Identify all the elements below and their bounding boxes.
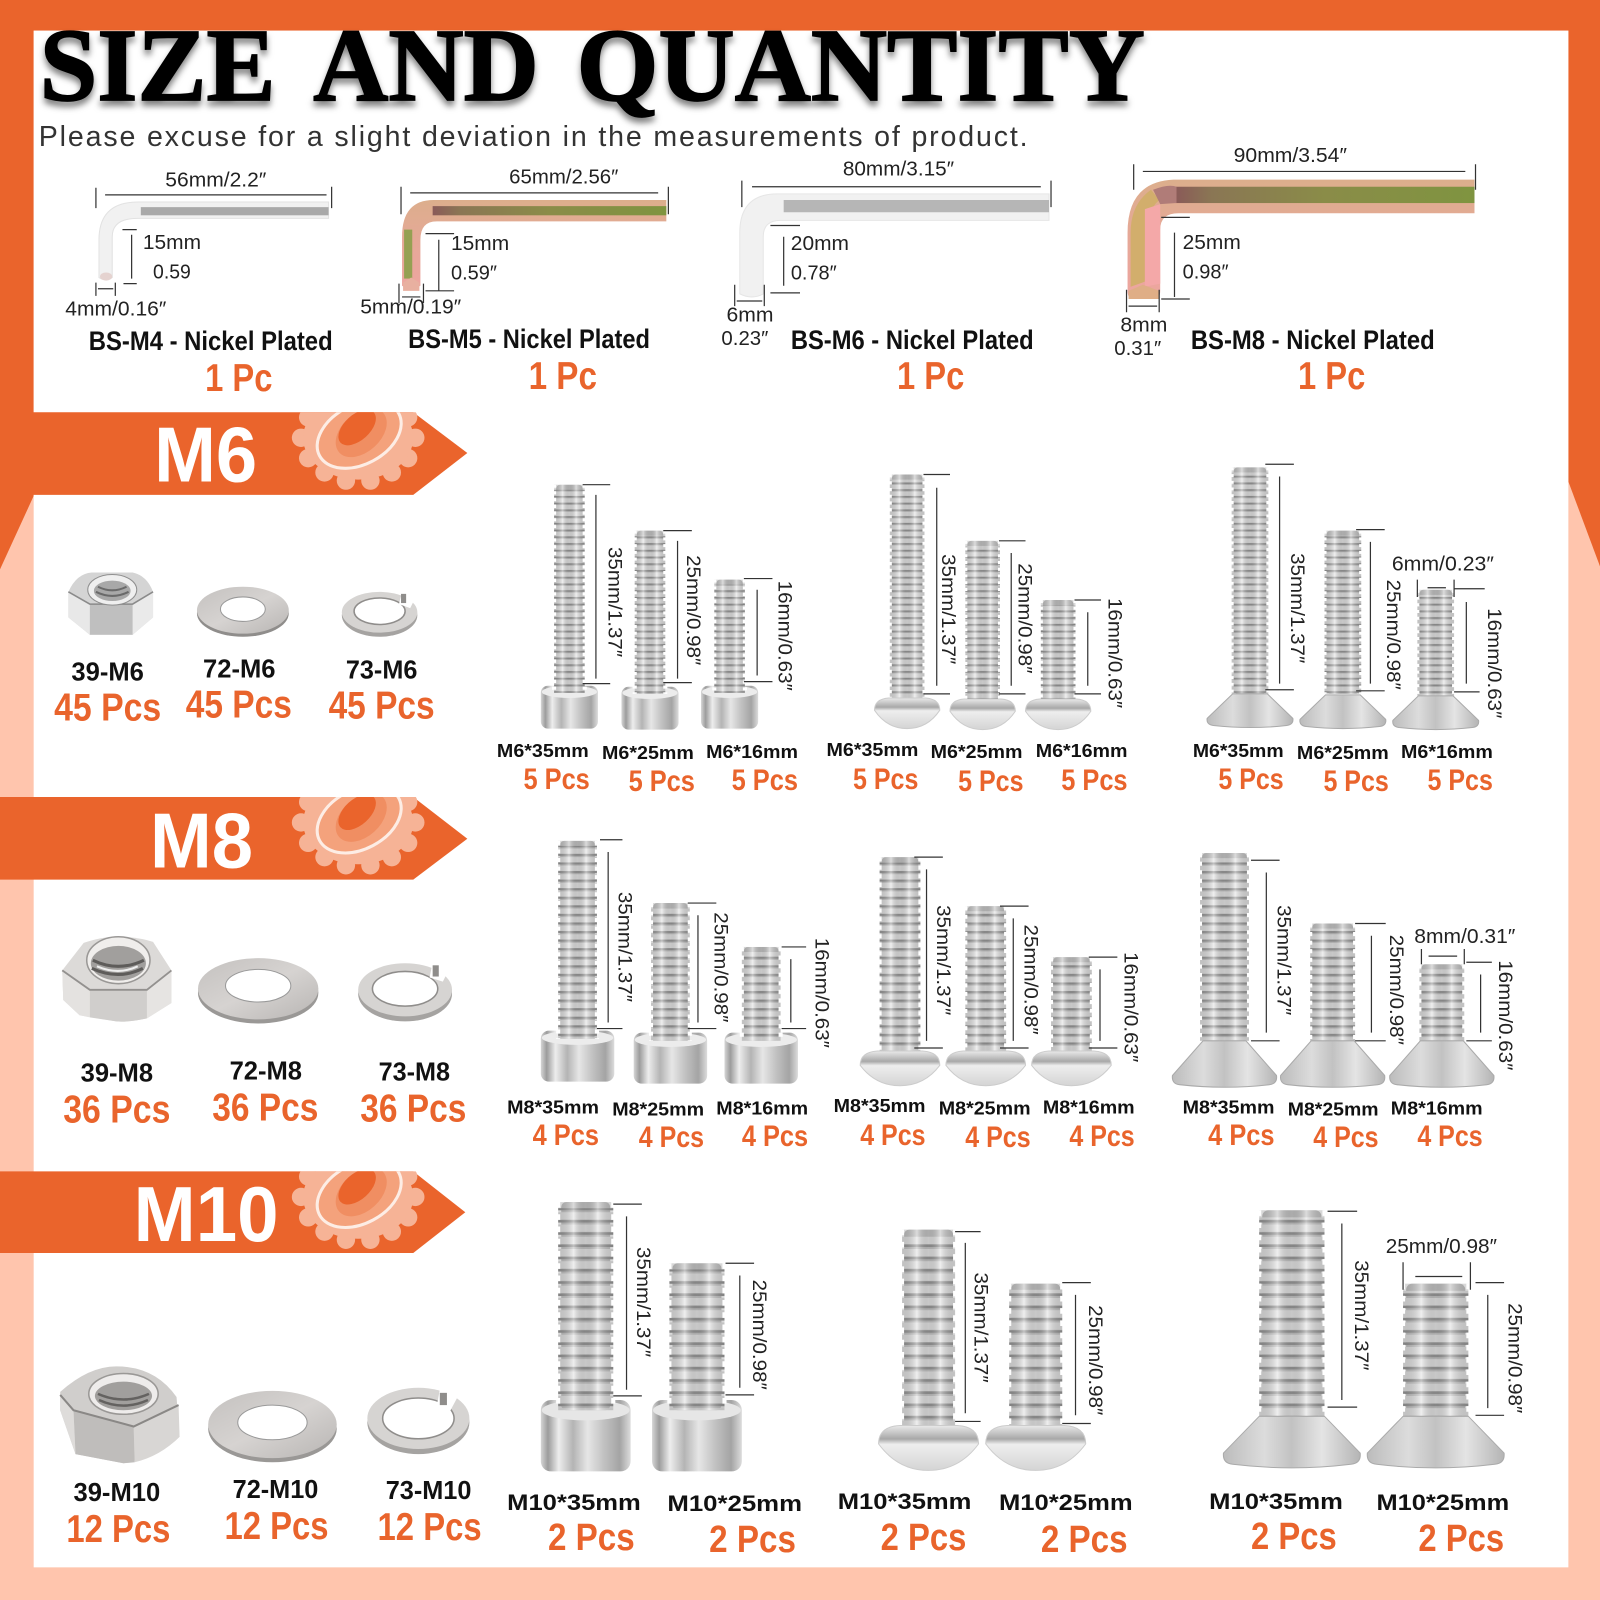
panel: M6 nuts and washers — [54, 572, 435, 729]
labels and quantities: 4 Pcs — [1417, 1120, 1483, 1153]
labels and quantities: M8*25mm — [612, 1098, 704, 1119]
bolt: M10*25 socket — [652, 1263, 742, 1471]
icon: M6 lock washer — [342, 592, 417, 637]
hex key BS-M5: BS-M5 - Nickel Plated — [408, 324, 650, 354]
dimension 16mm: 16mm/0.63″ — [1103, 598, 1125, 708]
panel: M8 button head bolts — [834, 857, 1142, 1154]
labels and quantities: 4 Pcs — [742, 1120, 808, 1153]
dimension 35mm: 35mm/1.37″ — [603, 547, 625, 657]
panel: M8 socket head bolts — [507, 840, 832, 1154]
bolt: M8*16 flat — [1390, 964, 1494, 1087]
bolt: M10*35 socket — [541, 1202, 631, 1471]
banner: M6 — [34, 412, 468, 495]
bolt: M8*25 flat — [1280, 923, 1385, 1087]
labels and quantities: 2 Pcs — [548, 1516, 635, 1558]
dimension lines — [1265, 464, 1485, 692]
subtitle: Please excuse for a slight deviation in the measurements of product. — [39, 121, 1028, 153]
labels and quantities: M6*35mm — [497, 740, 589, 761]
hex key BS-M6: 0.23″ — [721, 328, 768, 350]
dimension 16mm: 16mm/0.63″ — [1120, 952, 1142, 1062]
dimension 35mm: 35mm/1.37″ — [970, 1272, 992, 1383]
label: 73-M6: 73-M6 — [346, 657, 417, 685]
icon: M8 lock washer — [358, 962, 452, 1021]
labels and quantities: 2 Pcs — [1041, 1518, 1128, 1560]
labels and quantities: 5 Pcs — [958, 765, 1023, 798]
bolt: M8*16 button — [1032, 957, 1111, 1086]
panel: M6 socket head bolts — [497, 485, 798, 798]
quantity: 39-M6: 45 Pcs — [54, 686, 161, 729]
hex key BS-M4: 4mm/0.16″ — [65, 298, 166, 320]
dimension 35mm: 35mm/1.37″ — [1350, 1260, 1372, 1371]
labels and quantities: 2 Pcs — [1418, 1517, 1504, 1559]
bolt: M10*35 button — [879, 1230, 979, 1470]
bolt: M10*25 button — [986, 1284, 1086, 1470]
icon: M8 hex nut — [62, 937, 171, 1022]
labels and quantities — [827, 739, 1128, 798]
hex key BS-M4: 56mm/2.2″ — [165, 170, 266, 192]
dimension 25mm: 25mm/0.98″ — [1013, 563, 1035, 674]
dimension 8mm: 8mm/0.31″ — [1414, 926, 1515, 948]
dimension lines — [613, 1204, 754, 1396]
bolt: M8*25 socket — [634, 903, 707, 1084]
bolt: M6*35 socket — [541, 485, 598, 729]
dimension 35mm: 35mm/1.37″ — [613, 892, 635, 1002]
hex key BS-M6: 0.78″ — [791, 263, 837, 285]
hex key BS-M5: 15mm — [451, 233, 509, 255]
dimension 16mm: 16mm/0.63″ — [810, 938, 832, 1048]
label: 73-M10: 73-M10 — [386, 1477, 471, 1505]
bolt: M8*35 socket — [541, 841, 614, 1082]
quantity: 72-M10: 12 Pcs — [224, 1505, 329, 1548]
dimension 25mm: 25mm/0.98″ — [709, 912, 731, 1023]
dimension 16mm: 16mm/0.63″ — [1483, 608, 1505, 719]
bolt: M8*35 button — [860, 857, 940, 1086]
labels and quantities: 2 Pcs — [709, 1518, 796, 1560]
labels and quantities: 5 Pcs — [732, 764, 798, 797]
title: SIZE — [40, 7, 276, 123]
hex key BS-M4: BS-M4 - Nickel Plated — [89, 326, 333, 356]
banner: M8 — [0, 797, 468, 880]
labels and quantities: 5 Pcs — [629, 765, 695, 798]
labels and quantities: M8*35mm — [834, 1095, 926, 1116]
dimension 25mm: 25mm/0.98″ — [748, 1280, 770, 1390]
hex key BS-M6: 6mm — [727, 304, 773, 326]
labels and quantities — [507, 1490, 802, 1560]
labels and quantities: M8*35mm — [1183, 1096, 1274, 1117]
quantity: 73-M6: 45 Pcs — [329, 684, 435, 727]
bolt: M6*35 button — [874, 474, 940, 729]
icon: M10 hex nut — [60, 1366, 180, 1463]
labels and quantities: M10*25mm — [1377, 1490, 1509, 1515]
bolt: M6*25 flat — [1300, 531, 1386, 729]
dimension 25mm: 25mm/0.98″ — [1385, 935, 1407, 1045]
label: 72-M8: 72-M8 — [230, 1058, 302, 1086]
label: 72-M10: 72-M10 — [233, 1476, 318, 1504]
labels and quantities — [497, 740, 798, 798]
dimension lines — [597, 840, 806, 1029]
dimension lines — [914, 857, 1117, 1048]
labels and quantities: M6*35mm — [1193, 740, 1284, 761]
bolt: M8*16 socket — [724, 947, 798, 1084]
quantity: 73-M10: 12 Pcs — [378, 1506, 482, 1549]
quantity: 39-M8: 36 Pcs — [63, 1088, 170, 1131]
panel: hex keys — [65, 145, 1476, 400]
labels and quantities: M10*35mm — [507, 1490, 641, 1515]
quantity: 73-M8: 36 Pcs — [360, 1087, 466, 1130]
bolt: M8*35 flat — [1172, 853, 1277, 1087]
panel: M8 flat head bolts — [1172, 853, 1516, 1154]
hex key BS-M4: 1 Pc — [205, 357, 272, 400]
labels and quantities: M8*35mm — [507, 1096, 599, 1117]
hex key BS-M8: 0.31″ — [1114, 338, 1161, 360]
dimension 25mm: 25mm/0.98″ — [682, 555, 704, 665]
labels and quantities — [507, 1096, 808, 1154]
quantity: 72-M8: 36 Pcs — [212, 1086, 318, 1129]
label: 39-M10: 39-M10 — [73, 1479, 160, 1507]
panel: M10 nuts and washers — [60, 1366, 482, 1551]
labels and quantities — [1183, 1096, 1483, 1154]
labels and quantities — [834, 1095, 1135, 1154]
labels and quantities: M6*25mm — [931, 741, 1022, 762]
bolt: M6*25 button — [950, 541, 1015, 730]
labels and quantities: M10*25mm — [999, 1490, 1133, 1515]
labels and quantities: 4 Pcs — [1069, 1120, 1135, 1153]
dimension 25mm: 25mm/0.98″ — [1503, 1303, 1525, 1413]
banner: M6: M6 — [154, 413, 257, 499]
labels and quantities: 5 Pcs — [1428, 764, 1493, 797]
bolt: M8*25 button — [946, 906, 1026, 1086]
labels and quantities: M8*25mm — [1288, 1098, 1379, 1119]
labels and quantities: M10*25mm — [667, 1491, 802, 1516]
hex key BS-M6: 80mm/3.15″ — [843, 159, 954, 181]
icon: M10 flat washer — [208, 1391, 337, 1462]
dimension lines — [955, 1232, 1091, 1423]
dimension 35mm: 35mm/1.37″ — [632, 1247, 654, 1357]
bolt: M6*35 flat — [1207, 467, 1293, 728]
dimension width 25mm: 25mm/0.98″ — [1386, 1236, 1497, 1258]
hex key BS-M5: 65mm/2.56″ — [509, 167, 618, 189]
hex key BS-M5 — [360, 167, 668, 398]
title — [40, 7, 1145, 123]
banner: M8: M8 — [150, 798, 253, 884]
dimension 25mm: 25mm/0.98″ — [1020, 924, 1042, 1035]
labels and quantities — [1209, 1489, 1509, 1559]
labels and quantities: M6*16mm — [1036, 740, 1128, 761]
labels and quantities: M8*25mm — [939, 1097, 1031, 1118]
icon: M6 hex nut — [68, 572, 153, 635]
bolt: M10*25 flat — [1367, 1284, 1504, 1468]
hex key BS-M8: BS-M8 - Nickel Plated — [1191, 325, 1435, 355]
hex key BS-M4: 15mm — [143, 232, 201, 254]
icon: M10 lock washer — [367, 1388, 469, 1454]
hex key BS-M5: 1 Pc — [529, 355, 597, 398]
labels and quantities: M8*16mm — [1391, 1097, 1483, 1118]
hex key BS-M8: 8mm — [1120, 315, 1167, 337]
label: 72-M6: 72-M6 — [203, 656, 276, 684]
labels and quantities: 4 Pcs — [965, 1121, 1031, 1154]
hex key BS-M5: 5mm/0.19″ — [360, 296, 461, 318]
banner: M10: M10 — [134, 1172, 279, 1258]
labels and quantities: 4 Pcs — [860, 1119, 926, 1152]
labels and quantities: 5 Pcs — [523, 763, 590, 796]
hex key BS-M5: 0.59″ — [451, 263, 497, 285]
labels and quantities: 4 Pcs — [639, 1121, 704, 1154]
dimension 16mm: 16mm/0.63″ — [1494, 960, 1516, 1071]
labels and quantities: 5 Pcs — [1061, 764, 1128, 797]
dimension lines — [1251, 860, 1492, 1041]
label: 39-M8: 39-M8 — [81, 1060, 153, 1088]
labels and quantities: M10*35mm — [838, 1489, 971, 1514]
labels and quantities: 5 Pcs — [1323, 765, 1389, 798]
dimension lines — [583, 485, 772, 684]
dimension 25mm: 25mm/0.98″ — [1084, 1305, 1106, 1415]
labels and quantities: 4 Pcs — [1208, 1119, 1274, 1152]
labels and quantities: 5 Pcs — [1218, 763, 1284, 796]
dimension 25mm: 25mm/0.98″ — [1382, 580, 1404, 690]
hex key BS-M8: 90mm/3.54″ — [1234, 145, 1347, 167]
bolt: M6*16 button — [1026, 600, 1091, 730]
dimension 6mm: 6mm/0.23″ — [1392, 553, 1494, 575]
labels and quantities: 5 Pcs — [853, 763, 918, 796]
bolt: M6*25 socket — [621, 531, 679, 730]
dimension 16mm: 16mm/0.63″ — [774, 581, 796, 691]
hex key BS-M6 — [721, 159, 1051, 398]
hex key BS-M8: 25mm — [1183, 232, 1241, 254]
hex key BS-M6: BS-M6 - Nickel Plated — [791, 325, 1034, 355]
icon: M8 flat washer — [198, 958, 318, 1023]
panel: M6 flat head bolts — [1193, 464, 1505, 798]
bolt: M6*16 socket — [701, 580, 758, 729]
labels and quantities: M8*16mm — [1043, 1096, 1135, 1117]
dimension 35mm: 35mm/1.37″ — [932, 905, 954, 1015]
hex key BS-M8: 1 Pc — [1298, 355, 1365, 398]
hex key BS-M8 — [1114, 145, 1476, 398]
labels and quantities: 4 Pcs — [1313, 1121, 1379, 1154]
labels and quantities: M6*16mm — [1401, 741, 1493, 762]
dimension 35mm: 35mm/1.37″ — [937, 554, 959, 664]
quantity: 39-M10: 12 Pcs — [66, 1508, 170, 1551]
labels and quantities: M6*35mm — [827, 739, 918, 760]
labels and quantities — [1193, 740, 1493, 798]
panel: M10 button head bolts — [838, 1230, 1133, 1560]
labels and quantities: M10*35mm — [1209, 1489, 1343, 1514]
hex key BS-M6: 1 Pc — [897, 355, 964, 398]
hex key BS-M8: 0.98″ — [1183, 262, 1229, 284]
labels and quantities: M6*16mm — [706, 741, 798, 762]
label: 73-M8: 73-M8 — [379, 1059, 450, 1087]
dimension lines — [923, 474, 1101, 694]
labels and quantities: M6*25mm — [602, 742, 694, 763]
hex key BS-M4: 0.59 — [153, 262, 191, 284]
bolt: M10*35 flat — [1223, 1210, 1360, 1468]
panel: M10 flat head bolts — [1209, 1210, 1525, 1559]
dimension 35mm: 35mm/1.37″ — [1286, 553, 1308, 663]
quantity: 72-M6: 45 Pcs — [186, 683, 292, 726]
panel: M6 button head bolts — [827, 474, 1128, 798]
panel: M8 nuts and washers — [62, 937, 466, 1131]
panel: M10 socket head bolts — [507, 1202, 802, 1560]
title: QUANTITY — [577, 7, 1145, 123]
icon: M6 flat washer — [197, 587, 289, 637]
hex key BS-M6: 20mm — [791, 233, 849, 255]
title: AND — [313, 7, 539, 123]
labels and quantities: M8*16mm — [716, 1097, 808, 1118]
dimension lines — [1328, 1211, 1504, 1415]
bolt: M6*16 flat — [1393, 590, 1479, 730]
labels and quantities: 2 Pcs — [1251, 1515, 1337, 1557]
labels and quantities: 2 Pcs — [881, 1516, 966, 1558]
labels and quantities: 4 Pcs — [533, 1119, 599, 1152]
label: 39-M6: 39-M6 — [71, 659, 144, 687]
labels and quantities: M6*25mm — [1297, 742, 1389, 763]
dimension 35mm: 35mm/1.37″ — [1273, 905, 1295, 1015]
labels and quantities — [838, 1489, 1133, 1560]
hex key BS-M4 — [65, 170, 333, 400]
banner: M10 — [0, 1171, 466, 1253]
